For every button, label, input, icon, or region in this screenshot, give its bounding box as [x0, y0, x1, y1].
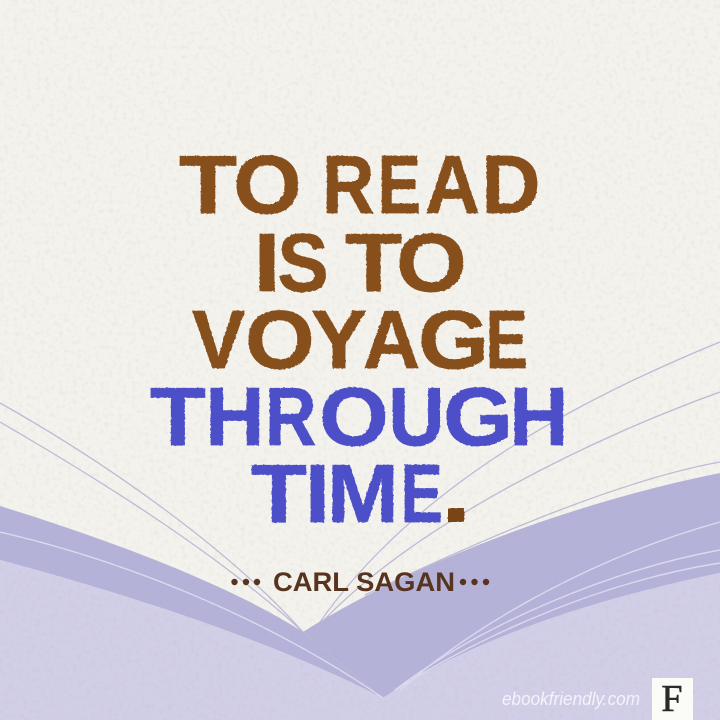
- quote line: THROUGH: H: [206, 370, 264, 463]
- quote line: TO READ: E: [378, 138, 421, 231]
- front pages: [0, 560, 720, 720]
- author name: CARL SAGAN: [273, 567, 455, 597]
- right page band: [303, 473, 720, 698]
- quote line: IS TO: I: [254, 216, 280, 309]
- quote line: VOYAGE: E: [486, 293, 528, 386]
- logo badge: [652, 678, 693, 720]
- quote line: TO READ: R: [322, 138, 374, 231]
- left dots: [231, 579, 260, 585]
- thin lifted page lines: [0, 342, 720, 632]
- quote line: THROUGH: U: [388, 370, 444, 463]
- attribution: [231, 567, 489, 597]
- quote line: THROUGH: T: [150, 370, 206, 463]
- quote line: TO READ: A: [425, 138, 480, 231]
- right dots: [460, 579, 489, 585]
- quote full stop: [448, 508, 464, 522]
- quote line: TIME: E: [401, 447, 443, 540]
- logo letter F: F: [661, 678, 683, 720]
- quote line: THROUGH: H: [510, 370, 568, 463]
- website credit: ebookfriendly.com: [502, 689, 640, 709]
- quote line: VOYAGE: A: [363, 293, 420, 386]
- left page band: [0, 506, 383, 698]
- quote line: VOYAGE: V: [192, 293, 245, 386]
- quote line: THROUGH: R: [265, 370, 316, 463]
- badge background: [652, 678, 693, 720]
- quote line: TO READ: T: [179, 138, 237, 231]
- open book illustration: [0, 342, 720, 720]
- quote line: VOYAGE: O: [245, 293, 315, 386]
- quote line: IS TO: T: [345, 216, 402, 309]
- quote line: IS TO: S: [278, 216, 328, 309]
- quote line: TIME: M: [327, 447, 399, 540]
- quote line: THROUGH: O: [319, 370, 389, 463]
- quote line: TIME: I: [305, 447, 330, 540]
- page edge lines on the bands: [0, 522, 720, 698]
- quote line: TO READ: O: [233, 138, 302, 231]
- quote line: VOYAGE: Y: [311, 293, 367, 386]
- quote line: TO READ: D: [482, 138, 540, 231]
- quote line: THROUGH: G: [443, 370, 513, 463]
- quote line: IS TO: O: [396, 216, 467, 309]
- quote heading: [150, 138, 568, 540]
- quote line: VOYAGE: G: [418, 293, 489, 386]
- quote line: TIME: T: [251, 447, 307, 540]
